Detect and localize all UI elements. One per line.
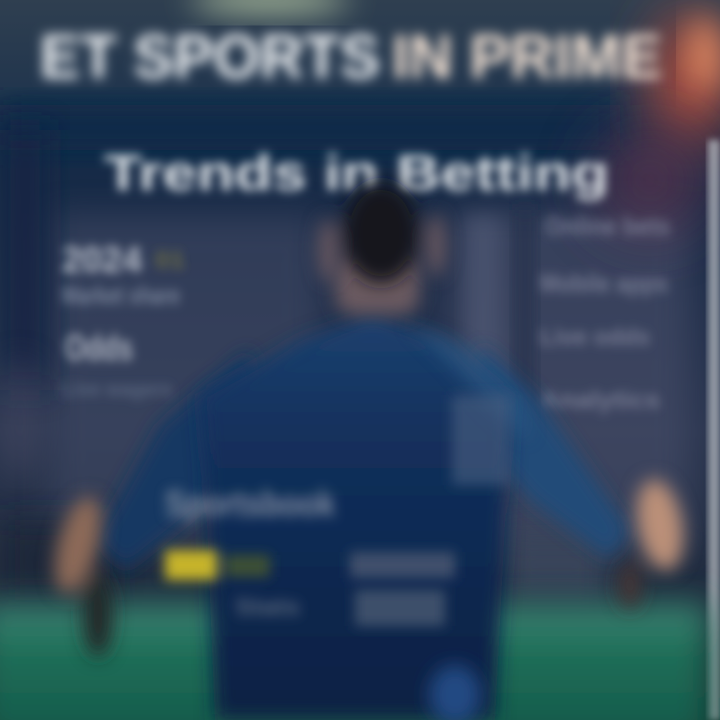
grass field (0, 604, 708, 720)
right text block: Online bets (545, 211, 670, 241)
right text block: Live odds (540, 324, 650, 351)
subtitle: Trends in Betting (104, 145, 609, 201)
player neck (335, 255, 420, 315)
player hands (46, 476, 690, 657)
right text block (540, 211, 670, 414)
main title: IN PRIME (392, 23, 662, 92)
right text block: Analytics (540, 387, 660, 414)
main title: ET SPORTS (40, 23, 380, 92)
left text block: Odds (65, 327, 133, 368)
left text block (62, 239, 185, 401)
jersey text: Stats (235, 594, 300, 621)
shirt shoulder highlight (405, 320, 530, 440)
player head (319, 183, 445, 283)
left text block: 2024 (62, 239, 142, 280)
player arms (95, 345, 630, 570)
main title (40, 23, 662, 92)
orange glow top right (190, 0, 720, 235)
shorts highlight (429, 665, 481, 720)
player torso (200, 315, 510, 720)
jersey text (165, 395, 510, 626)
right text block: Mobile apps (540, 268, 668, 298)
right edge light strip (708, 140, 720, 720)
jersey text: Sportsbook (165, 483, 336, 524)
left text block: 01 (155, 247, 185, 274)
player figure (46, 183, 690, 720)
left text block: Market share (62, 280, 180, 310)
left text block: Live wagers (62, 379, 172, 401)
